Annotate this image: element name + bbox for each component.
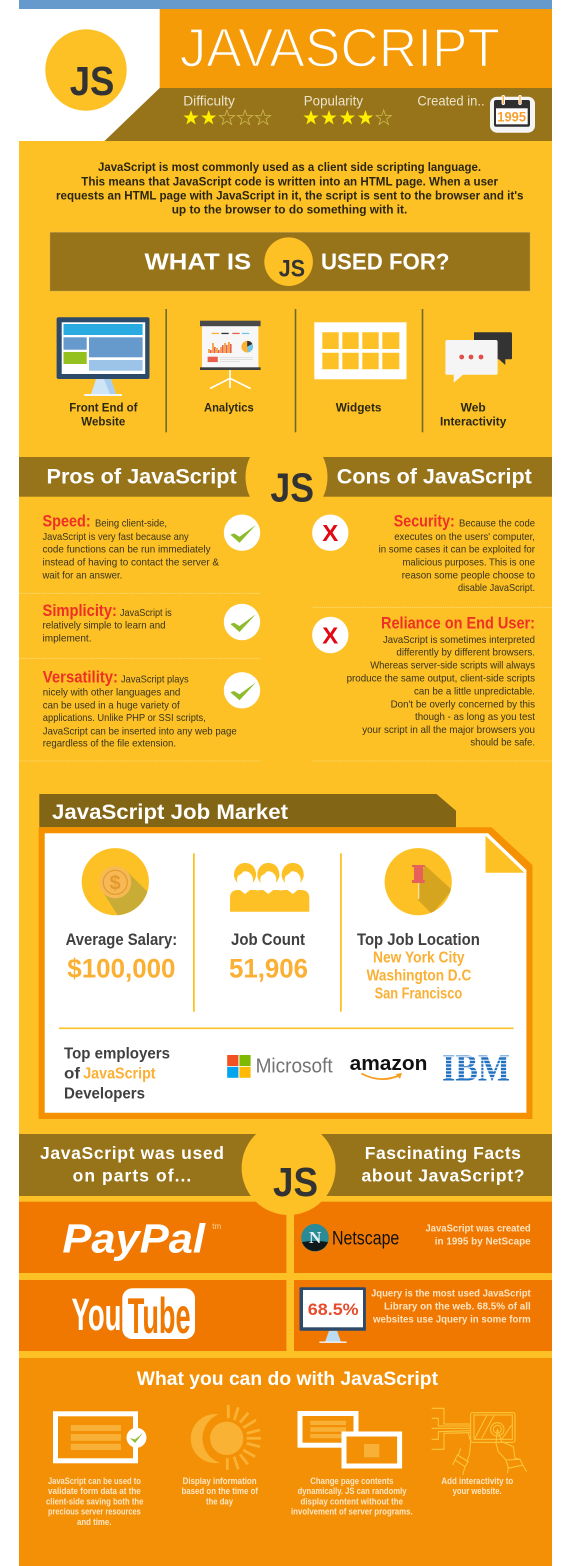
panel: pro speed: code functions can be run immediately bbox=[42, 544, 211, 556]
panel: con security: Security: bbox=[394, 512, 455, 531]
panel: pro versatility: can be used in a huge variety of bbox=[43, 699, 180, 711]
icon: salary coin: $ bbox=[110, 872, 121, 894]
intro paragraph bbox=[56, 160, 524, 216]
panel: analytics bbox=[200, 321, 261, 415]
stat: average salary: Average Salary: bbox=[66, 931, 177, 949]
column: time of day: based on the time of bbox=[182, 1486, 259, 1496]
panel: pro versatility: nicely with other languages and bbox=[43, 687, 181, 699]
icon: salary coin bbox=[82, 848, 149, 916]
column: interactivity: your website. bbox=[453, 1486, 502, 1496]
panel: con reliance on end user bbox=[312, 613, 535, 749]
logo: Amazon: amazon bbox=[350, 1053, 427, 1075]
panel: con security: malicious purposes. This is one bbox=[402, 557, 535, 569]
banner: what is JS used for: USED FOR? bbox=[321, 248, 450, 274]
panel: pro versatility: regardless of the file extension. bbox=[43, 738, 176, 750]
panel: con security: executes on the users' computer, bbox=[394, 531, 535, 543]
column: validate form data bbox=[46, 1414, 146, 1527]
column: validate form data: validate form data at the bbox=[48, 1486, 141, 1496]
logo: Netscape: N bbox=[309, 1228, 322, 1247]
panel: pro speed: instead of having to contact the server & bbox=[42, 557, 219, 569]
banner: pros and cons: Pros of JavaScript bbox=[46, 465, 237, 488]
column: change page contents: display content without the bbox=[300, 1496, 403, 1506]
icon: X mark: X bbox=[322, 520, 339, 546]
banner: what is JS used for: WHAT IS bbox=[144, 248, 251, 274]
heading: job market tab bbox=[39, 794, 456, 827]
column: validate form data: JavaScript can be used to bbox=[48, 1476, 141, 1486]
panel: con reliance on end user: Whereas server-side scripts will always bbox=[370, 660, 535, 672]
panel: con reliance on end user: can be a little unpredictable. bbox=[414, 685, 535, 697]
column: time of day: Display information bbox=[183, 1476, 257, 1486]
stat: top job locations: Top Job Location bbox=[357, 931, 480, 949]
panel: pro versatility bbox=[43, 668, 260, 750]
column: change page contents bbox=[291, 1414, 413, 1517]
logo: JS circle: JS bbox=[70, 58, 114, 104]
panel: pro simplicity bbox=[42, 601, 260, 644]
panel: pro speed: Speed: bbox=[42, 512, 91, 531]
stat: job count bbox=[229, 931, 308, 983]
panel: front end of website: Website bbox=[81, 415, 126, 429]
column: time of day: the day bbox=[206, 1496, 233, 1506]
banner: what is JS used for: JS bbox=[279, 256, 305, 283]
title: JAVASCRIPT bbox=[180, 17, 500, 79]
icon: X mark: X bbox=[322, 622, 339, 648]
panel: con reliance on end user: though - as long as you test bbox=[415, 711, 535, 723]
panel: con reliance on end user: produce the same output, client-side scripts bbox=[347, 673, 535, 685]
stat: top job locations bbox=[357, 931, 480, 1003]
icon: check mark bbox=[224, 514, 260, 551]
panel: con reliance on end user: should be safe. bbox=[470, 737, 535, 749]
panel: web interactivity: Web bbox=[461, 401, 486, 415]
panel: con reliance on end user: Reliance on End User: bbox=[381, 613, 535, 632]
icon: monitor 68.5% bbox=[300, 1287, 366, 1343]
panel: YouTube: Tube bbox=[128, 1288, 191, 1344]
column: validate form data: and time. bbox=[77, 1517, 111, 1527]
intro paragraph: This means that JavaScript code is written into an HTML page. When a user bbox=[81, 174, 498, 188]
icon: chat bubbles bbox=[445, 332, 512, 383]
stat: average salary bbox=[66, 931, 177, 983]
popularity rating bbox=[303, 93, 391, 124]
banner: used on / facts: on parts of... bbox=[73, 1166, 191, 1186]
icon: sun and moon bbox=[191, 1405, 261, 1470]
panel: web interactivity bbox=[440, 332, 512, 429]
panel: pro simplicity: JavaScript is bbox=[120, 607, 172, 619]
column: validate form data: client-side saving both the bbox=[46, 1496, 143, 1506]
panel: PayPal: PayPal bbox=[62, 1216, 207, 1262]
panel: analytics: Analytics bbox=[204, 401, 254, 415]
text: top employers: Top employers bbox=[64, 1045, 170, 1062]
main yellow background bbox=[19, 141, 552, 1358]
column: validate form data: precious server resources bbox=[48, 1507, 141, 1517]
panel: PayPal bbox=[19, 1202, 286, 1273]
panel: widgets bbox=[314, 322, 406, 415]
icon: form check bbox=[56, 1414, 146, 1461]
panel: pro simplicity: implement. bbox=[42, 632, 92, 644]
logo: Microsoft: Microsoft bbox=[256, 1056, 333, 1078]
icon: calendar 1995 bbox=[490, 95, 535, 133]
panel: Netscape fact bbox=[294, 1202, 552, 1273]
column: change page contents: dynamically. JS can randomly bbox=[298, 1486, 406, 1496]
banner: used on / facts bbox=[19, 1134, 552, 1196]
panel: con security bbox=[312, 512, 535, 594]
panel: pro versatility: Versatility: bbox=[43, 668, 118, 687]
stat: top job locations: Washington D.C bbox=[366, 968, 471, 985]
stat: average salary: $100,000 bbox=[67, 953, 176, 983]
panel: con reliance on end user: Don't be overly concerned by this bbox=[391, 698, 535, 710]
column: time of day bbox=[182, 1405, 261, 1506]
panel: jQuery fact: websites use Jquery in some form bbox=[372, 1314, 531, 1326]
stat: top job locations: New York City bbox=[373, 950, 465, 967]
stat: job count: 51,906 bbox=[229, 953, 308, 983]
icon: tablet and hands bbox=[432, 1408, 527, 1475]
panel: pro simplicity: relatively simple to learn and bbox=[42, 620, 166, 632]
panel: YouTube bbox=[19, 1280, 286, 1351]
icon: monitor 68.5%: 68.5% bbox=[308, 1300, 359, 1319]
heading: What you can do with JavaScript bbox=[137, 1369, 439, 1390]
panel: pro speed bbox=[42, 512, 260, 581]
header band bbox=[19, 0, 552, 141]
icon: X mark bbox=[312, 617, 348, 653]
banner: used on / facts: about JavaScript? bbox=[362, 1166, 524, 1186]
panel: front end of website bbox=[57, 317, 150, 429]
banner: pros and cons bbox=[19, 433, 552, 521]
panel: Netscape fact: JavaScript was created bbox=[425, 1223, 531, 1235]
text: top employers: of bbox=[64, 1065, 81, 1082]
icon: X mark bbox=[312, 514, 348, 551]
banner: used on / facts: JavaScript was used bbox=[40, 1143, 224, 1163]
logo: Netscape: Netscape bbox=[332, 1228, 399, 1249]
column: change page contents: Change page contents bbox=[310, 1476, 394, 1486]
intro paragraph: up to the browser to do something with it. bbox=[172, 202, 407, 216]
panel: front end of website: Front End of bbox=[69, 401, 138, 415]
panel: web interactivity: Interactivity bbox=[440, 415, 507, 429]
panel: YouTube: You bbox=[72, 1289, 122, 1340]
icon: widget grid bbox=[314, 322, 406, 379]
created in: Created in.. bbox=[417, 93, 485, 108]
panel: jQuery fact: Jquery is the most used JavaScript bbox=[371, 1288, 531, 1300]
icon: check mark bbox=[224, 672, 260, 708]
banner: what is JS used for bbox=[50, 232, 530, 291]
panel: jQuery fact: Library on the web. 68.5% of all bbox=[384, 1301, 531, 1313]
icon: location pin bbox=[385, 848, 452, 915]
banner: pros and cons: JS bbox=[270, 465, 314, 511]
column: change page contents: involvement of server programs. bbox=[291, 1507, 413, 1517]
heading: job market tab: JavaScript Job Market bbox=[52, 801, 288, 824]
banner: used on / facts: Fascinating Facts bbox=[365, 1143, 521, 1163]
banner: pros and cons: Cons of JavaScript bbox=[337, 465, 532, 488]
icon: overlapping windows bbox=[300, 1414, 400, 1466]
panel: con security: in some cases it can be exploited for bbox=[379, 544, 535, 556]
JS circle badge bbox=[242, 1121, 336, 1215]
stat: job count: Job Count bbox=[231, 931, 305, 949]
panel: con reliance on end user: differently by different browsers. bbox=[396, 647, 535, 659]
intro paragraph: requests an HTML page with JavaScript in it, the script is sent to the browser and it's bbox=[56, 188, 524, 202]
panel: pro versatility: JavaScript plays bbox=[121, 674, 189, 686]
intro paragraph: JavaScript is most commonly used as a client side scripting language. bbox=[98, 160, 481, 174]
panel: pro versatility: JavaScript can be inserted into any web page bbox=[43, 725, 237, 737]
icon: calendar 1995: 1995 bbox=[497, 109, 526, 125]
icon: three people bbox=[230, 863, 309, 912]
logo: IBM: IBM bbox=[442, 1048, 510, 1090]
panel: pro simplicity: Simplicity: bbox=[42, 601, 117, 620]
icon: monitor bbox=[57, 317, 150, 396]
panel: Netscape fact: in 1995 by NetScape bbox=[435, 1235, 531, 1247]
panel: widgets: Widgets bbox=[336, 401, 382, 415]
difficulty rating bbox=[183, 93, 271, 124]
panel: con security: Because the code bbox=[459, 518, 535, 530]
text: top employers: Developers bbox=[64, 1085, 145, 1102]
text: top employers: JavaScript bbox=[83, 1065, 156, 1082]
panel: con security: disable JavaScript. bbox=[458, 582, 535, 594]
panel: pro versatility: applications. Unlike PHP or SSI scripts, bbox=[43, 712, 206, 724]
logo: JS circle bbox=[45, 29, 127, 111]
panel: con reliance on end user: JavaScript is sometimes interpreted bbox=[383, 634, 535, 646]
logo: Netscape bbox=[301, 1224, 399, 1251]
column: interactivity bbox=[432, 1408, 527, 1496]
panel: job market card bbox=[39, 827, 532, 1119]
panel: what you can do bbox=[19, 1358, 552, 1566]
text: top employers bbox=[64, 1045, 170, 1102]
panel: jQuery fact bbox=[294, 1280, 552, 1351]
column: interactivity: Add interactivity to bbox=[441, 1476, 514, 1486]
panel: con security: reason some people choose to bbox=[402, 569, 535, 581]
panel: con reliance on end user: your script in all the major browsers you bbox=[362, 724, 535, 736]
difficulty rating: Difficulty bbox=[183, 93, 235, 108]
panel: pro speed: wait for an answer. bbox=[42, 569, 122, 581]
logo: Microsoft bbox=[227, 1055, 333, 1078]
stat: top job locations: San Francisco bbox=[375, 986, 462, 1003]
panel: pro speed: JavaScript is very fast because any bbox=[42, 531, 189, 543]
icon: check mark bbox=[224, 604, 260, 640]
JS circle badge: JS bbox=[273, 1159, 318, 1205]
panel: PayPal: tm bbox=[212, 1222, 222, 1231]
popularity rating: Popularity bbox=[304, 93, 363, 108]
panel: pro speed: Being client-side, bbox=[95, 518, 167, 530]
icon: projector board bbox=[200, 321, 261, 388]
